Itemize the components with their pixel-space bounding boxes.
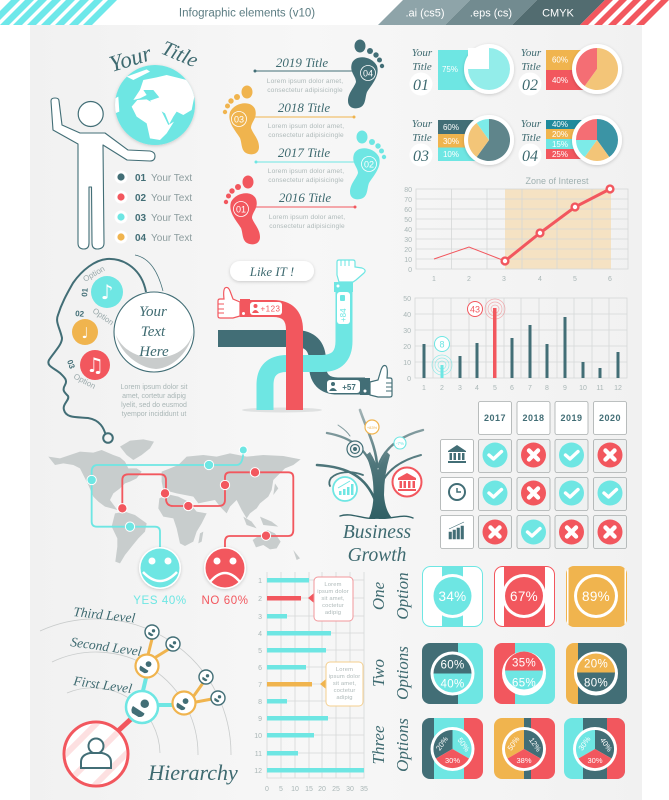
pie block 03: 10%	[443, 150, 459, 159]
pie block 02: 02	[522, 77, 538, 94]
highlighted bar 5: 43	[470, 304, 480, 314]
step 2016: Lorem ipsum dolor amet,	[269, 214, 345, 221]
tile 30/40/30: 30%	[587, 756, 603, 765]
tile 20/50/30: 30%	[445, 756, 460, 765]
x axis labels: 11	[596, 385, 604, 392]
x ticks: 35	[360, 786, 368, 793]
cyan route	[87, 446, 247, 557]
x ticks	[265, 786, 368, 793]
step 2019: 2019 Title	[276, 55, 328, 70]
x axis labels	[422, 385, 622, 392]
lorem text: Lorem ipsum dolor sit	[121, 384, 188, 391]
y axis labels: 30	[403, 328, 411, 335]
y axis labels: 0	[408, 267, 412, 274]
pie block 04: 04	[522, 148, 538, 165]
lorem text: lyelit, sed do eusmod	[121, 402, 187, 409]
level labels	[70, 604, 143, 696]
icon: smiley	[139, 547, 181, 589]
highlighted bar 5	[468, 299, 505, 378]
legend item 04: 04	[135, 233, 147, 244]
pie block 04: Title	[521, 132, 541, 144]
pie block 04: Your	[521, 118, 542, 130]
tile 89%	[566, 566, 627, 627]
page title: Infographic elements (v10)	[179, 8, 315, 20]
x axis labels: 4	[538, 276, 542, 283]
row 2 marks	[482, 480, 622, 506]
x axis labels: 2	[467, 276, 471, 283]
bars	[267, 578, 364, 772]
icon: cyan ring	[394, 437, 406, 449]
row numbers: 8	[258, 699, 262, 706]
tab: ai	[378, 0, 470, 25]
data points	[502, 186, 613, 264]
year labels: 2018	[522, 413, 545, 423]
second level nodes	[136, 654, 196, 714]
icon: bank row	[448, 445, 466, 463]
icon: cyan ring: -7%	[396, 441, 404, 446]
row numbers: 12	[254, 768, 262, 775]
row numbers: 7	[258, 682, 262, 689]
panel: yearly checklist table	[440, 402, 626, 548]
side labels	[369, 572, 412, 772]
tile 50/12/38	[494, 718, 555, 779]
cyan thumb up	[334, 260, 365, 292]
tile 30/40/30: 30%	[576, 735, 593, 752]
tab: eps	[445, 0, 537, 25]
step 2017: Lorem ipsum dolor amet,	[268, 168, 344, 175]
legend item 04	[114, 230, 192, 244]
y axis labels: 30	[404, 237, 412, 244]
step 2019: consectetur adipisicingle	[267, 87, 343, 94]
row numbers: 2	[258, 596, 262, 603]
zone label: Zone of Interest	[525, 176, 589, 186]
shadow below pipes	[242, 408, 322, 412]
row numbers: 9	[258, 716, 262, 723]
side labels: Options	[393, 718, 412, 772]
icon: person	[51, 98, 155, 249]
tab: cmyk: CMYK	[542, 8, 575, 20]
x axis labels: 5	[493, 385, 497, 392]
x axis labels: 6	[510, 385, 514, 392]
icon: orange ring: +83%	[367, 425, 378, 430]
pie block 01: 75%	[442, 65, 458, 74]
option labels: 03	[65, 359, 77, 371]
option 02 icon	[72, 319, 98, 345]
legend item 01: 01	[135, 173, 147, 184]
icon: sad face	[204, 547, 246, 589]
tile 35/65: 35%	[512, 658, 536, 670]
panel: business growth tree: Growth	[348, 545, 406, 566]
step 2016	[224, 176, 356, 244]
third level icons	[148, 629, 221, 702]
level arcs	[40, 619, 231, 755]
continents	[48, 439, 301, 563]
tile 60/40: 60%	[441, 660, 464, 672]
tile 20/80	[566, 643, 627, 704]
side labels: Three	[369, 725, 388, 765]
y axis labels: 50	[403, 296, 411, 303]
badge +84	[337, 292, 350, 324]
legend item 02: 02	[135, 193, 147, 204]
pie block 02	[518, 44, 622, 96]
legend item 03	[114, 210, 192, 224]
y axis labels: 50	[404, 217, 412, 224]
tile 20/80: 20%	[584, 658, 608, 670]
highlighted bar 2	[432, 336, 452, 378]
x axis labels: 8	[545, 385, 549, 392]
panel: head options	[48, 255, 194, 443]
lorem text	[121, 384, 188, 418]
red route	[118, 468, 293, 557]
icon: globe	[115, 65, 195, 145]
row numbers: 5	[258, 648, 262, 655]
panel: your title person and globe: Title	[158, 36, 202, 72]
result cells	[478, 440, 626, 548]
y axis labels: 40	[403, 312, 411, 319]
option 01 icon	[91, 276, 123, 308]
year labels	[484, 413, 621, 423]
red header stripes	[580, 0, 669, 25]
heading: hierarchy: Hierarchy	[147, 760, 238, 785]
like it pill: Like IT !	[249, 264, 294, 279]
pie block 03: 03	[413, 148, 429, 165]
y axis labels: 40	[404, 227, 412, 234]
pie block 04: 40%	[552, 120, 568, 129]
x axis labels: 7	[528, 385, 532, 392]
badge +123: +123	[260, 304, 281, 314]
panel: hierarchy	[40, 604, 238, 795]
third level nodes	[145, 625, 225, 705]
pie block 01: Your	[412, 47, 433, 59]
tile 20/50/30	[422, 718, 483, 779]
callout red	[308, 577, 353, 621]
row 1 marks	[482, 442, 622, 468]
tile 89%: 89%	[582, 589, 610, 604]
side labels: Option	[393, 572, 412, 620]
tile 35/65	[494, 643, 555, 704]
horizontal bar chart	[254, 572, 368, 793]
step 2017: 2017 Title	[278, 145, 330, 160]
step 2016: 2016 Title	[279, 190, 331, 205]
tile 34%	[422, 566, 483, 627]
tile 20/50/30: 20%	[434, 735, 450, 752]
step 2018: consectetur adipisicingle	[268, 132, 344, 139]
x axis labels: 9	[563, 385, 567, 392]
pie block 02: 60%	[552, 56, 568, 64]
end ring	[103, 433, 113, 443]
x axis labels: 10	[579, 385, 587, 392]
row numbers: 1	[258, 578, 262, 585]
callout yellow: sit amet,	[333, 681, 356, 687]
x axis labels: 3	[502, 276, 506, 283]
header bar	[0, 0, 669, 25]
step 2019: 04	[363, 68, 373, 78]
level labels: Second Level	[70, 634, 143, 659]
x ticks: 0	[265, 786, 269, 793]
highlighted bar 2: 8	[439, 340, 445, 350]
option labels	[65, 264, 115, 391]
row numbers: 10	[254, 733, 262, 740]
option 03 icon: ♫	[86, 353, 104, 377]
tile 67%: 67%	[510, 589, 538, 604]
option 02 icon: ♩	[81, 324, 89, 342]
tile 20/50/30: 50%	[456, 736, 472, 754]
row numbers	[254, 578, 262, 775]
speech tail	[135, 255, 163, 291]
lorem text: tyempor incididunt ut	[122, 411, 186, 418]
pie block 03: 30%	[443, 137, 459, 146]
badge +84: +84	[339, 308, 348, 322]
tile 30/40/30: 40%	[598, 736, 614, 754]
step 2018: 03	[234, 114, 244, 124]
tile 50/12/38: 38%	[516, 756, 532, 765]
callout yellow: ipsum dolor	[329, 674, 360, 680]
heading: your title: Your	[106, 40, 155, 77]
yellow highlight bar	[267, 682, 312, 686]
callout red: coctetur	[322, 603, 344, 609]
step 2017	[254, 130, 386, 199]
side labels: Options	[393, 646, 412, 700]
icon: growth chart	[333, 477, 357, 501]
callout red: Lorem	[324, 582, 342, 588]
legend item 01: Your Text	[151, 173, 192, 184]
panel: like it pipes	[218, 260, 392, 412]
step 2019	[254, 40, 384, 108]
row icon cells	[440, 440, 474, 548]
panel: your title person and globe	[51, 36, 202, 249]
tile 50/12/38: 12%	[527, 736, 543, 754]
tab: cmyk	[512, 0, 605, 25]
row numbers: 4	[258, 631, 262, 638]
y axis labels: 20	[403, 344, 411, 351]
heading: business growth: Business	[343, 522, 411, 543]
y axis labels: 10	[403, 360, 411, 367]
step 2016: consectetur adipisicingle	[269, 223, 345, 230]
y axis labels: 70	[404, 197, 412, 204]
x ticks: 20	[318, 786, 326, 793]
tile 60/40	[422, 643, 483, 704]
pie block 04	[518, 115, 622, 166]
lorem text: amet, cortetur adipig	[122, 393, 186, 400]
red pipe	[240, 308, 294, 410]
pie block 03: 60%	[443, 123, 459, 132]
icon: orange ring	[365, 420, 379, 434]
legend item 02	[114, 190, 192, 204]
pie block 02: Title	[521, 61, 541, 73]
level labels: First Level	[72, 673, 133, 696]
bar chart	[403, 296, 627, 392]
side labels: Two	[369, 659, 388, 687]
like it pill	[230, 261, 314, 281]
pie block 02: Your	[521, 47, 542, 59]
legend item 03: 03	[135, 213, 147, 224]
step 2017: 02	[364, 160, 374, 170]
step 2018: Lorem ipsum dolor amet,	[268, 123, 344, 130]
head outline	[48, 259, 146, 436]
step 2018: 2018 Title	[278, 100, 330, 115]
x ticks: 5	[279, 786, 283, 793]
y axis labels	[403, 296, 411, 383]
tab: ai: .ai (cs5)	[405, 8, 445, 20]
speech bubble: Here	[138, 344, 169, 360]
line chart	[404, 176, 628, 283]
row 3 marks	[482, 520, 622, 544]
pie block 03: Title	[412, 132, 432, 144]
tab: eps: .eps (cs)	[470, 8, 512, 20]
pie block 04: 25%	[552, 150, 568, 159]
year labels: 2019	[560, 413, 583, 423]
legend item 03: Your Text	[151, 213, 192, 224]
cyan pipe	[265, 285, 344, 410]
speech bubble: Your	[139, 304, 167, 320]
legend item 02: Your Text	[151, 193, 192, 204]
y axis labels: 0	[407, 376, 411, 383]
badge +57	[327, 380, 360, 393]
step 2019: Lorem ipsum dolor amet,	[267, 78, 343, 85]
legend item 04: Your Text	[151, 233, 192, 244]
option labels: Option	[82, 264, 106, 284]
x ticks: 15	[305, 786, 313, 793]
legend: options list	[114, 170, 192, 244]
icon: chart row	[449, 522, 464, 539]
year labels: 2020	[599, 413, 621, 423]
first level node	[126, 691, 158, 723]
panel: business growth tree	[317, 410, 423, 566]
pie block 01	[410, 44, 514, 96]
x axis labels: 12	[614, 385, 622, 392]
badge +57: +57	[342, 383, 356, 392]
callout red: ipsum dolor	[317, 589, 349, 595]
panel: world map	[48, 439, 301, 607]
pie block 03	[410, 115, 514, 166]
x axis labels: 1	[432, 276, 436, 283]
panel: pie charts	[410, 44, 622, 166]
x axis labels: 5	[573, 276, 577, 283]
yes label: YES 40%	[133, 595, 187, 607]
x axis labels: 2	[440, 385, 444, 392]
option labels: Option	[72, 372, 97, 391]
y axis labels: 10	[404, 257, 412, 264]
panel: footprints timeline	[223, 40, 386, 244]
x axis labels: 3	[458, 385, 462, 392]
option 01 icon: ♪	[101, 280, 113, 304]
option labels: 01	[80, 287, 90, 297]
speech bubble: Text	[141, 324, 166, 340]
option labels: Option	[91, 306, 115, 327]
step 2018	[223, 86, 356, 154]
x axis labels: 4	[475, 385, 479, 392]
pie block 01: 01	[413, 77, 429, 94]
red highlight bar	[267, 596, 301, 600]
panel: option tiles	[369, 566, 627, 779]
pie block 04: 15%	[552, 140, 568, 149]
root node	[62, 720, 130, 788]
callout red: sit amet,	[321, 596, 345, 602]
tile 60/40: 40%	[441, 678, 464, 690]
dark pipe	[218, 338, 365, 386]
y axis labels: 60	[404, 207, 412, 214]
x ticks: 10	[291, 786, 299, 793]
callout yellow: adipig	[336, 695, 353, 701]
no label: NO 60%	[201, 595, 249, 607]
tile 67%	[494, 566, 555, 627]
dark thumb up	[360, 366, 392, 397]
tile 35/65: 65%	[512, 678, 536, 690]
icon: target	[347, 441, 363, 457]
bars	[422, 317, 620, 378]
pie block 04: 20%	[552, 130, 568, 139]
y axis labels: 20	[404, 247, 412, 254]
legend item 01	[114, 170, 192, 184]
option 03 icon	[80, 350, 110, 380]
year labels: 2017	[484, 413, 506, 423]
x axis labels	[432, 276, 612, 283]
tile 20/80: 80%	[584, 678, 608, 690]
tree	[317, 410, 423, 518]
badge +123	[250, 302, 282, 315]
level labels: Third Level	[73, 604, 136, 626]
red thumb up	[218, 287, 250, 318]
row numbers: 6	[258, 665, 262, 672]
side labels: One	[369, 581, 388, 610]
callout yellow	[320, 662, 363, 706]
x axis labels: 1	[422, 385, 426, 392]
zone of interest band	[505, 189, 611, 269]
step 2016: 01	[236, 204, 246, 214]
tile 30/40/30	[564, 718, 625, 779]
y axis labels	[404, 187, 412, 274]
x ticks: 30	[346, 786, 354, 793]
tile 50/12/38: 50%	[505, 735, 522, 752]
callout yellow: coctetur	[334, 688, 355, 694]
callout yellow: Lorem	[336, 667, 353, 673]
speech bubble	[114, 292, 194, 372]
pie block 01: Title	[412, 61, 432, 73]
pie block 02: 40%	[552, 76, 568, 85]
cyan header stripes	[0, 0, 117, 25]
x ticks: 25	[332, 786, 340, 793]
pie block 03: Your	[412, 118, 433, 130]
option labels: 02	[75, 309, 85, 319]
step 2017: consectetur adipisicingle	[268, 177, 344, 184]
connectors	[118, 639, 212, 731]
year headers	[478, 402, 626, 434]
icon: clock row	[449, 484, 465, 500]
tile 34%: 34%	[439, 589, 466, 604]
x axis labels: 6	[608, 276, 612, 283]
data line	[434, 189, 610, 261]
icon: bank	[392, 468, 422, 496]
row numbers: 3	[258, 614, 262, 621]
y axis labels: 80	[404, 187, 412, 194]
row numbers: 11	[255, 751, 262, 758]
callout red: adipig	[325, 610, 341, 616]
